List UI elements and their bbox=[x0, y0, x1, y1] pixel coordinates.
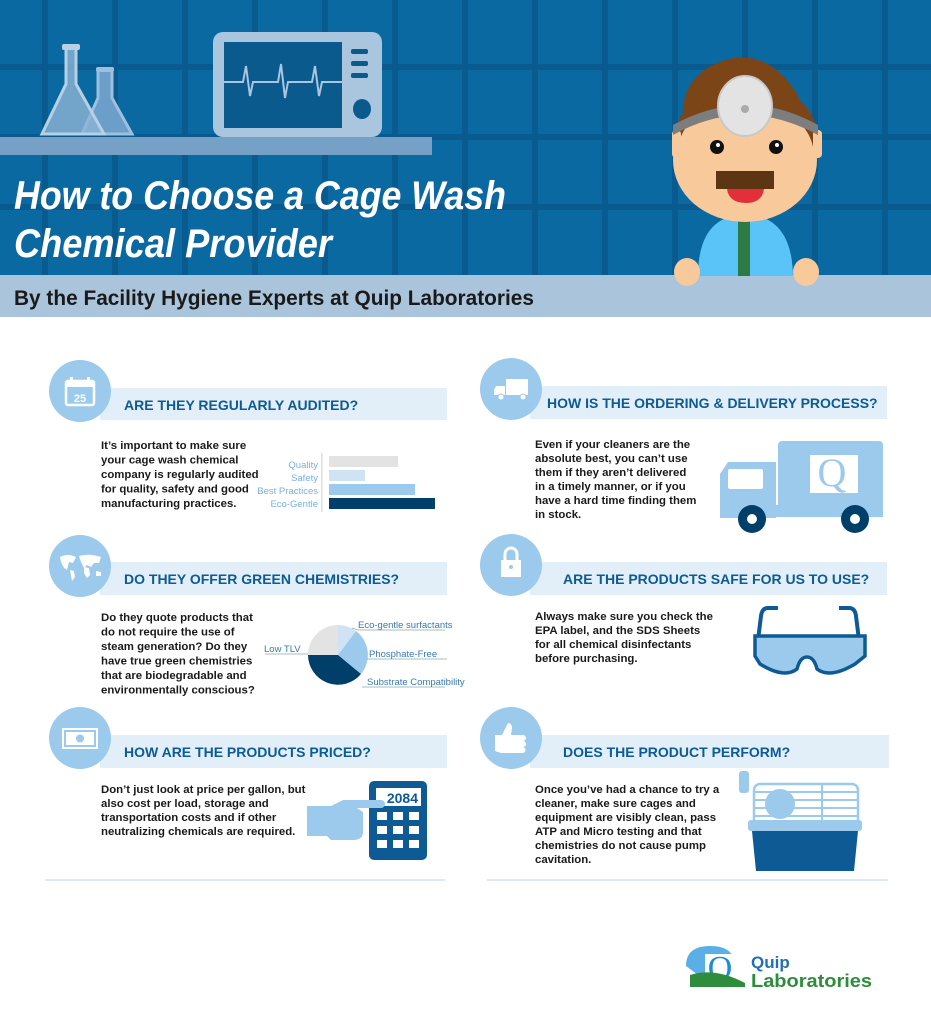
subtitle band bbox=[0, 275, 931, 317]
bar chart: Best Practices bbox=[257, 486, 318, 497]
panel: green chemistries: steam generation? Do they bbox=[101, 641, 248, 653]
logo: Quip Laboratories: Laboratories bbox=[751, 971, 872, 991]
panel: perform: cleaner, make sure cages and bbox=[535, 798, 696, 810]
header background bbox=[0, 0, 931, 276]
icon: animal cage bbox=[739, 771, 862, 871]
panel: priced bbox=[49, 707, 447, 860]
panel: delivery: them if they aren’t delivered bbox=[535, 467, 686, 479]
logo: Quip Laboratories bbox=[686, 946, 872, 991]
pie chart: Low TLV bbox=[264, 644, 301, 655]
character: doctor bbox=[672, 57, 822, 286]
icon: delivery truck bbox=[720, 441, 883, 533]
panel: priced: transportation costs and if other bbox=[101, 812, 277, 824]
icon: padlock bbox=[480, 534, 542, 596]
panel: green chemistries: that are biodegradable and bbox=[101, 670, 247, 682]
bar chart: Eco-Gentle bbox=[270, 499, 318, 510]
panel: delivery: in a timely manner, or if you bbox=[535, 481, 686, 493]
panel: audited: company is regularly audited bbox=[101, 469, 259, 481]
icon: goggles bbox=[755, 608, 865, 673]
panel: audited: It’s important to make sure bbox=[101, 440, 246, 452]
logo: Quip Laboratories: Q bbox=[708, 950, 732, 987]
panel: green chemistries: environmentally conscious? bbox=[101, 684, 255, 696]
icon: hand and calculator: 2084 bbox=[387, 790, 418, 806]
bar chart: Safety bbox=[291, 473, 318, 484]
icon: truck small bbox=[480, 358, 542, 420]
panel: priced: HOW ARE THE PRODUCTS PRICED? bbox=[124, 744, 371, 760]
title: Chemical Provider bbox=[14, 222, 334, 266]
panel: delivery bbox=[480, 358, 887, 533]
panel: audited: manufacturing practices. bbox=[101, 498, 236, 510]
panel: priced: Don’t just look at price per gallon, but bbox=[101, 784, 306, 796]
shelf bbox=[0, 137, 432, 155]
icon: delivery truck: Q bbox=[818, 450, 847, 495]
icon: flasks bbox=[42, 44, 132, 134]
icon: world map bbox=[49, 535, 111, 597]
title bbox=[14, 174, 506, 266]
panel: safe: ARE THE PRODUCTS SAFE FOR US TO USE? bbox=[563, 571, 869, 587]
pie chart: Substrate Compatibility bbox=[367, 677, 465, 688]
panel: audited bbox=[49, 360, 447, 512]
panel: perform bbox=[480, 707, 889, 871]
panel: perform: ATP and Micro testing and that bbox=[535, 826, 702, 838]
panel: priced: neutralizing chemicals are required. bbox=[101, 826, 295, 838]
pie chart: Phosphate-Free bbox=[369, 649, 437, 660]
panel: perform: equipment are visibly clean, pass bbox=[535, 812, 716, 824]
panel: priced: also cost per load, storage and bbox=[101, 798, 269, 810]
panel: perform: DOES THE PRODUCT PERFORM? bbox=[563, 744, 790, 760]
panel: green chemistries: DO THEY OFFER GREEN CHEMISTRIES? bbox=[124, 571, 399, 587]
pie chart bbox=[264, 620, 465, 688]
panel: safe: Always make sure you check the bbox=[535, 611, 713, 623]
panel: safe: before purchasing. bbox=[535, 653, 638, 665]
icon: thumbs up bbox=[480, 707, 542, 769]
panel: green chemistries: Do they quote products that bbox=[101, 612, 253, 624]
icon: calendar: 25 bbox=[74, 393, 86, 405]
panel: delivery: Even if your cleaners are the bbox=[535, 439, 690, 451]
panel: perform: chemistries do not cause pump bbox=[535, 840, 706, 852]
panel: delivery: in stock. bbox=[535, 509, 581, 521]
panel: audited: for quality, safety and good bbox=[101, 484, 249, 496]
panel: audited: ARE THEY REGULARLY AUDITED? bbox=[124, 397, 358, 413]
panel: green chemistries: have true green chemistries bbox=[101, 656, 252, 668]
logo: Quip Laboratories: Quip bbox=[751, 953, 790, 972]
pie chart: Eco-gentle surfactants bbox=[358, 620, 453, 631]
bar chart: Quality bbox=[288, 460, 318, 471]
panel: safe bbox=[480, 534, 887, 673]
panel: delivery: HOW IS THE ORDERING & DELIVERY PROCESS? bbox=[547, 395, 878, 411]
panel: safe: for all chemical disinfectants bbox=[535, 639, 691, 651]
title: How to Choose a Cage Wash bbox=[14, 174, 506, 218]
icon: money bbox=[49, 707, 111, 769]
icon: calendar bbox=[49, 360, 111, 422]
panel: safe: EPA label, and the SDS Sheets bbox=[535, 625, 700, 637]
panel: green chemistries bbox=[49, 535, 465, 696]
panel: delivery: have a hard time finding them bbox=[535, 495, 696, 507]
subtitle band: By the Facility Hygiene Experts at Quip Laboratories bbox=[14, 287, 534, 310]
panel: perform: cavitation. bbox=[535, 854, 591, 866]
icon: heart monitor bbox=[213, 32, 382, 137]
panel: audited: your cage wash chemical bbox=[101, 454, 238, 466]
icon: hand and calculator bbox=[307, 781, 427, 860]
panel: delivery: absolute best, you can’t use bbox=[535, 453, 688, 465]
bar chart bbox=[257, 453, 435, 512]
panel: green chemistries: do not require the use of bbox=[101, 626, 235, 638]
panel: perform: Once you’ve had a chance to try a bbox=[535, 784, 720, 796]
